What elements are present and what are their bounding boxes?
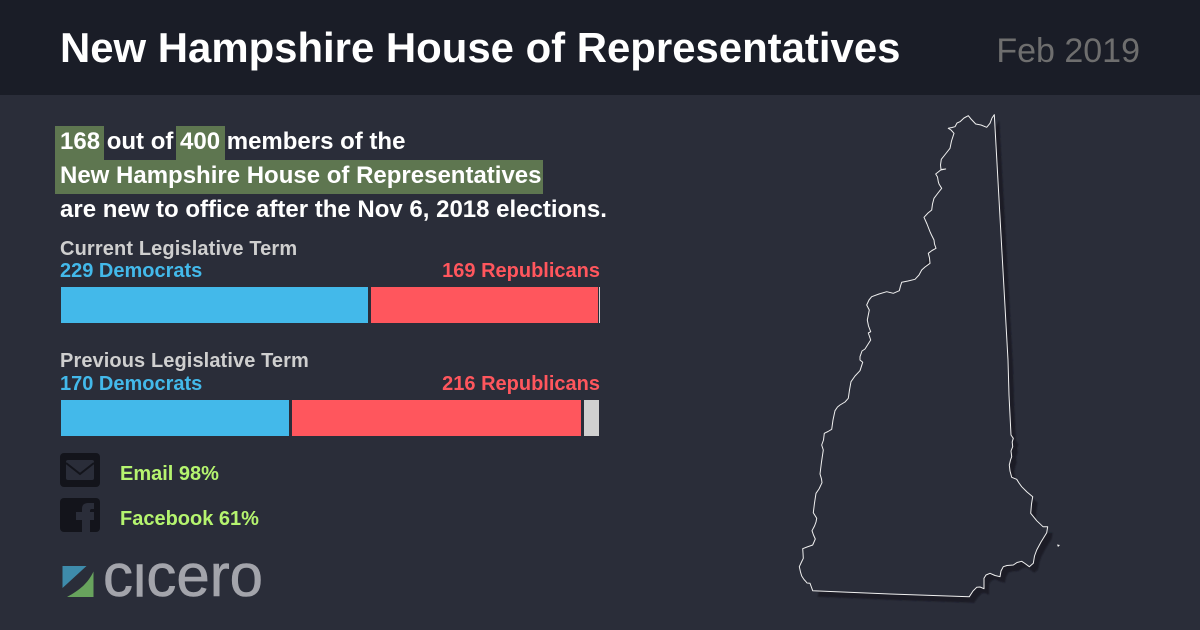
current term democrats label: 229 Democrats xyxy=(60,260,202,282)
previous term democrats label: 170 Democrats xyxy=(60,373,202,395)
title: New Hampshire House of Representatives xyxy=(60,24,900,71)
header band xyxy=(0,0,1200,95)
intro text: are new to office after the Nov 6, 2018 elections. xyxy=(60,196,607,223)
logo mark xyxy=(62,566,94,597)
logo i dot mask xyxy=(135,548,145,564)
previous term republicans label: 216 Republicans xyxy=(442,373,600,395)
date: Feb 2019 xyxy=(996,32,1140,70)
intro text: 168 out of 400 members of the xyxy=(60,128,405,155)
email stat: Email 98% xyxy=(120,463,219,485)
map shadow xyxy=(818,121,1053,603)
intro text: New Hampshire House of Representatives xyxy=(60,162,542,189)
icon: facebook xyxy=(60,498,100,532)
intro text xyxy=(60,128,607,223)
previous term heading: Previous Legislative Term xyxy=(60,350,309,372)
map island xyxy=(1057,544,1060,547)
highlight block: 168 xyxy=(55,126,104,160)
highlight block: chamber name xyxy=(55,160,543,194)
icon: email xyxy=(60,453,100,487)
current term republicans label: 169 Republicans xyxy=(442,260,600,282)
previous term bar chart xyxy=(61,400,599,436)
highlight block: 400 xyxy=(176,126,225,160)
logo wordmark: cicero xyxy=(103,542,263,609)
current term heading: Current Legislative Term xyxy=(60,238,297,260)
cicero logo xyxy=(62,542,263,609)
map outline xyxy=(799,115,1048,597)
current term bar chart xyxy=(61,287,600,323)
email-facebook stat: Facebook 61% xyxy=(120,508,259,530)
